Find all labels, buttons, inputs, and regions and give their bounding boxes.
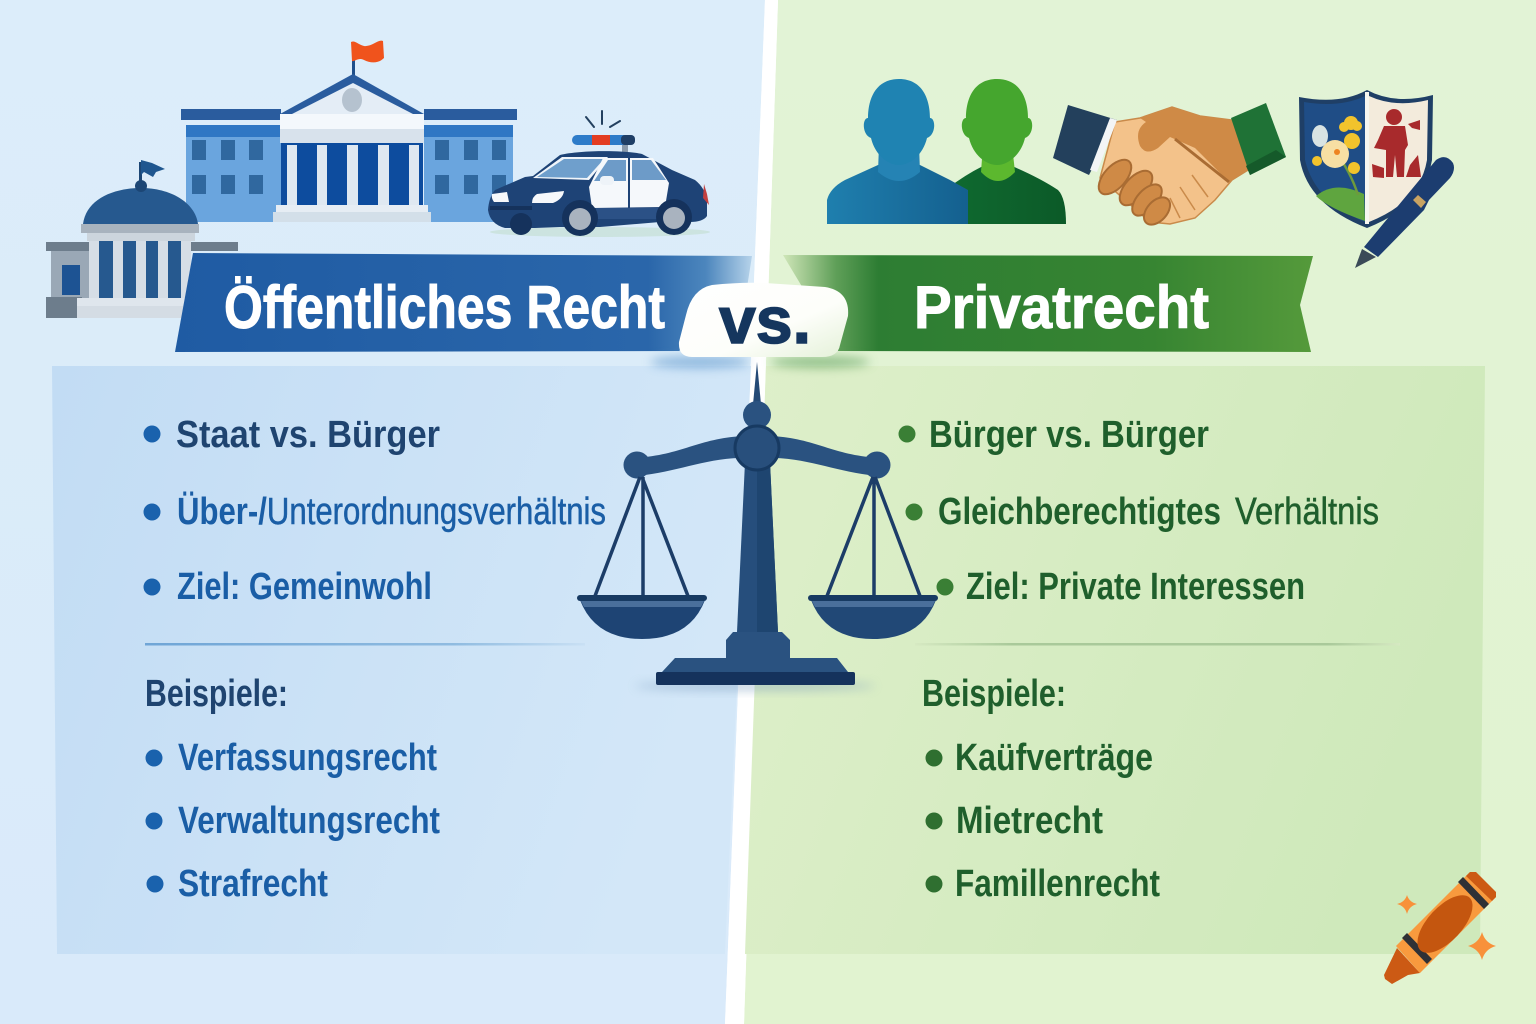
icon: balance scale	[577, 362, 938, 690]
key facts: public law: Über-/Unterordnungsverhältnis	[177, 490, 606, 533]
panel: public law	[52, 366, 751, 954]
siren rays	[586, 111, 620, 127]
key facts: public law	[144, 414, 606, 608]
icon: pen	[1355, 157, 1454, 268]
key facts: public law: Staat vs. Bürger	[176, 414, 440, 456]
banner: Öffentliches Recht: Öffentliches Recht	[224, 274, 665, 341]
examples: public law: Verwaltungsrecht	[178, 800, 440, 842]
flowers	[1312, 116, 1362, 195]
examples: public law: Beispiele:	[145, 673, 288, 715]
examples: private law: Famillenrecht	[955, 863, 1160, 905]
panel: private law	[745, 366, 1485, 954]
background: left side	[0, 0, 765, 1024]
examples: public law	[145, 673, 440, 905]
icon: two people	[827, 79, 1066, 224]
banner: Privatrecht	[783, 255, 1313, 352]
icon: crayon	[1384, 872, 1496, 984]
vs. badge: vs.	[719, 283, 811, 357]
red figure	[1372, 109, 1421, 178]
key facts: private law: Gleichberechtigtes	[938, 491, 1221, 533]
key facts: private law: Bürger vs. Bürger	[929, 414, 1209, 456]
banner: Privatrecht: Privatrecht	[914, 274, 1209, 341]
key facts: public law: Ziel: Gemeinwohl	[177, 566, 432, 608]
examples: private law: Kaüfverträge	[955, 737, 1153, 779]
examples: private law	[922, 673, 1160, 905]
examples: public law: Strafrecht	[178, 863, 328, 905]
banner: Öffentliches Recht	[175, 253, 752, 352]
key facts: private law	[898, 414, 1379, 608]
examples: private law: Mietrecht	[956, 800, 1103, 842]
icon: handshake	[1053, 103, 1286, 230]
person: blue	[827, 79, 968, 224]
background: right side	[744, 0, 1536, 1024]
icon: police car	[488, 111, 710, 237]
sparkles	[1397, 895, 1496, 960]
examples: private law: Beispiele:	[922, 673, 1066, 715]
icon: government building with flag	[181, 41, 517, 222]
icon: coat of arms shield	[1299, 90, 1433, 228]
icon: domed courthouse	[46, 160, 238, 318]
key facts: private law: Ziel: Private Interessen	[966, 566, 1305, 608]
examples: public law: Verfassungsrecht	[178, 737, 437, 779]
key facts: private law: Verhältnis	[1235, 491, 1379, 533]
person: green	[948, 79, 1066, 224]
vs. badge	[650, 283, 870, 368]
